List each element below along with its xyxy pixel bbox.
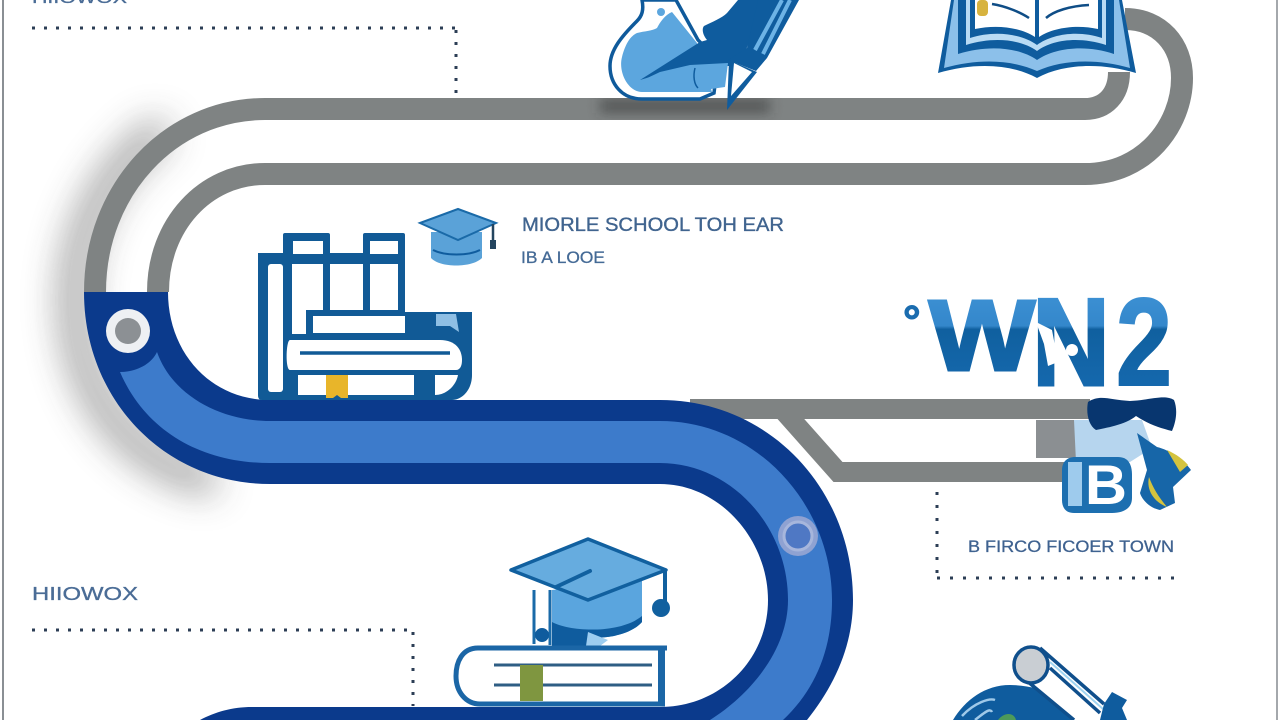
dotted leader: bottom left [32,630,413,706]
big WN2 title: N [1032,274,1110,412]
small graduation cap icon [420,209,496,266]
road shadow [74,128,215,482]
dotted leader: top left [32,28,456,94]
bottom left label: HIIOWOX [32,584,138,604]
right caption: B FIRCO FICOER TOWN [968,537,1174,556]
icon: globe with scroll [953,647,1127,720]
grey road: upper section [95,19,1182,292]
big WN2 title: W [929,280,1036,392]
road marker: bend [778,516,818,556]
icon: graduation cap on book [456,539,670,704]
icon: stack of books [258,233,472,400]
icon: ribbon, B tile and cap: B [1085,453,1127,516]
big WN2 title: 2 [1116,274,1172,412]
big WN2 title: ° [903,297,921,346]
middle school subheading: IB A LOOE [521,248,605,267]
blue road [84,292,853,720]
middle school heading: MIORLE SCHOOL TOH EAR [522,215,784,236]
grey road: lower branch [690,409,1090,472]
shading on grey road under flask [600,99,770,113]
dotted leader: right [937,492,1176,578]
icon: flask and pencil [610,0,799,110]
road marker: start [106,309,150,353]
icon: ribbon, B tile and cap [1062,397,1191,516]
icon: open book [938,0,1136,78]
big WN2 title [903,274,1172,412]
